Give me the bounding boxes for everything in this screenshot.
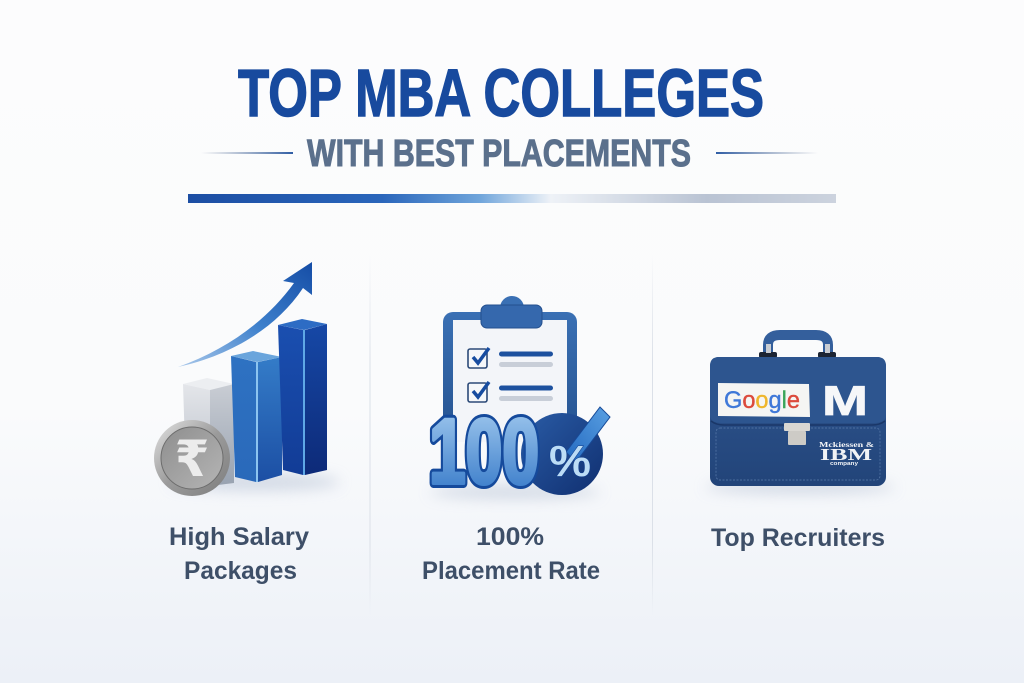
- title: TOP MBA COLLEGES: [238, 56, 764, 131]
- panel: top recruiters: [705, 335, 895, 552]
- big 100: 100: [429, 401, 539, 503]
- big 100: 100: [429, 401, 539, 503]
- subtitle: WITH BEST PLACEMENTS: [307, 133, 691, 175]
- chart bar: medium blue: [231, 351, 282, 482]
- logo: IBM block: [819, 441, 874, 467]
- briefcase handle: [759, 335, 836, 358]
- logo: Google label: Google: [724, 387, 800, 414]
- clasp: [784, 423, 810, 445]
- icon: rising bar chart with rupee coin: [154, 262, 340, 496]
- icon: rupee coin: ₹: [175, 430, 209, 488]
- badge circle: [521, 413, 603, 495]
- label: high salary packages: Packages: [184, 557, 297, 585]
- label: 100% placement rate: Placement Rate: [422, 557, 600, 585]
- icon: rupee coin: [154, 420, 230, 496]
- gradient rule under the heading: [188, 194, 836, 203]
- checklist row 1: [468, 348, 553, 368]
- logo: IBM block: company: [830, 461, 858, 467]
- logo: M: M: [822, 377, 868, 424]
- panel: high salary packages: [154, 262, 340, 585]
- icon: clipboard with 100% badge: [429, 296, 610, 503]
- small percent: %: [549, 437, 591, 486]
- label: 100% placement rate: 100%: [476, 523, 544, 551]
- icon: briefcase with recruiter logos: [705, 335, 895, 494]
- checklist row 2: [468, 382, 553, 402]
- arrow: upward growth: [178, 262, 312, 367]
- logo: IBM block: Mckiessen &: [819, 441, 874, 449]
- slash check: [566, 407, 610, 462]
- label: high salary packages: High Salary: [169, 523, 309, 551]
- chart bar: short silver: [183, 378, 234, 486]
- logo: IBM block: IBM: [820, 445, 872, 464]
- briefcase body: [710, 357, 886, 486]
- logo: Google label: [718, 383, 810, 417]
- panel: 100% placement rate: [422, 296, 610, 585]
- label: top recruiters: Top Recruiters: [711, 524, 885, 552]
- clipboard board: [443, 296, 577, 442]
- chart bar: tall navy: [278, 319, 327, 475]
